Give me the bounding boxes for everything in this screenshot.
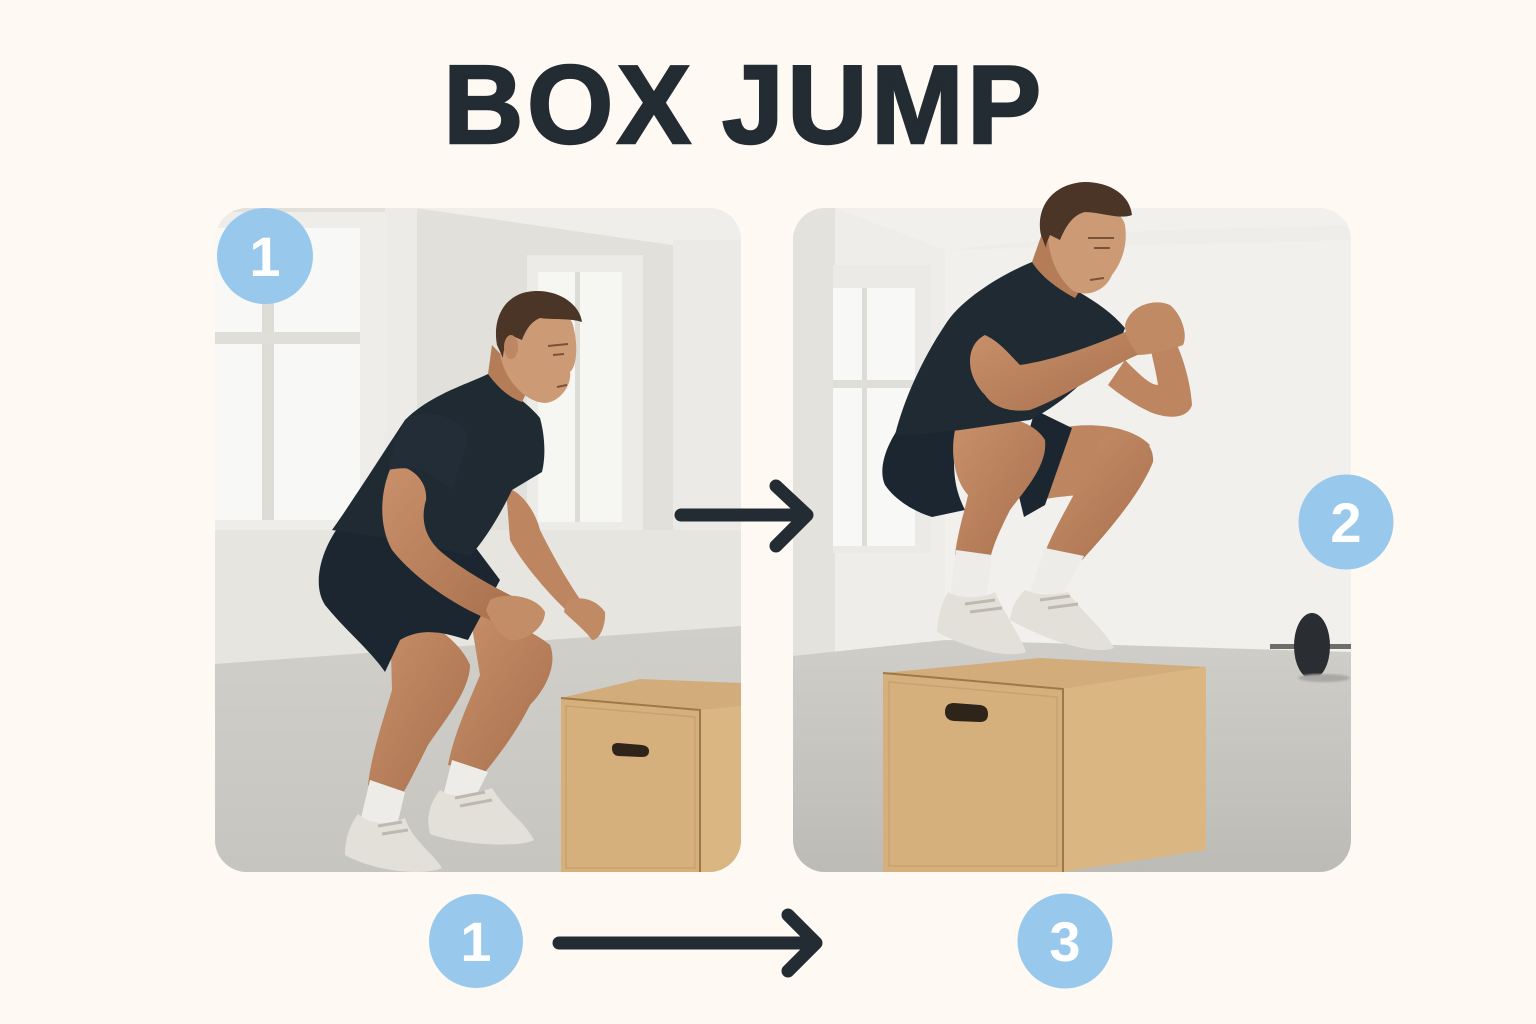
torso shirt — [895, 262, 1125, 435]
near shoe — [345, 814, 442, 872]
badge: number 1 on panel: 1 — [249, 225, 281, 288]
near sock — [950, 550, 992, 600]
sleeve — [390, 419, 407, 470]
side wall — [793, 208, 835, 656]
hair — [1040, 182, 1132, 248]
torso shirt — [332, 374, 544, 556]
near leg — [953, 417, 1045, 560]
far thigh — [1040, 425, 1150, 500]
hair — [496, 291, 582, 358]
laces — [378, 792, 492, 834]
neck — [1032, 225, 1090, 298]
arrow: between panels — [681, 486, 807, 546]
badge: number 2 beside panel — [1298, 474, 1394, 570]
near hand — [486, 596, 545, 640]
face details — [548, 344, 568, 387]
far shorts — [1015, 410, 1072, 517]
far shin — [1045, 434, 1153, 560]
head — [1047, 205, 1126, 294]
lower wall — [215, 530, 336, 532]
left window — [215, 208, 417, 548]
panel: step 1 crouch photo — [215, 208, 741, 872]
near leg — [368, 632, 470, 792]
ceiling — [835, 208, 1351, 250]
far hand — [564, 598, 605, 640]
title: BOX JUMP — [443, 43, 1045, 167]
ceiling — [415, 208, 741, 245]
far shoe — [1010, 590, 1114, 650]
head — [500, 310, 576, 403]
near arm — [970, 330, 1145, 411]
laces — [965, 596, 1078, 612]
figure: jumping athlete — [882, 182, 1192, 654]
neck — [488, 345, 525, 402]
right window — [527, 255, 643, 530]
shorts — [319, 522, 500, 672]
badge: number 2 beside panel: 2 — [1330, 491, 1362, 554]
bright wall — [945, 240, 1351, 652]
far leg — [448, 615, 552, 772]
near shoe — [937, 592, 1026, 654]
badge: number 3 bottom — [1018, 894, 1112, 988]
far arm — [1108, 325, 1192, 417]
window — [833, 265, 915, 553]
badge: number 3 bottom: 3 — [1049, 910, 1081, 973]
wooden box — [883, 658, 1206, 872]
badge: number 1 bottom: 1 — [460, 910, 492, 973]
floor — [215, 626, 741, 872]
wooden box — [561, 679, 741, 872]
far sock — [1030, 548, 1084, 595]
near sock — [361, 780, 405, 823]
floor — [793, 640, 1351, 872]
ear — [504, 335, 518, 359]
barbell — [1270, 613, 1351, 682]
near arm — [382, 468, 512, 620]
far wall — [673, 240, 741, 530]
panel: step 2 jump photo — [793, 208, 1351, 872]
figure: crouching athlete — [319, 291, 605, 872]
far sock — [444, 760, 488, 796]
arrow: bottom row — [559, 915, 816, 971]
badge: number 1 on panel — [217, 208, 313, 304]
hands — [1125, 302, 1185, 355]
near shorts — [882, 420, 965, 517]
face details — [1088, 238, 1114, 280]
far shoe — [428, 788, 534, 845]
badge: number 1 bottom — [429, 894, 523, 988]
far arm — [506, 488, 582, 610]
